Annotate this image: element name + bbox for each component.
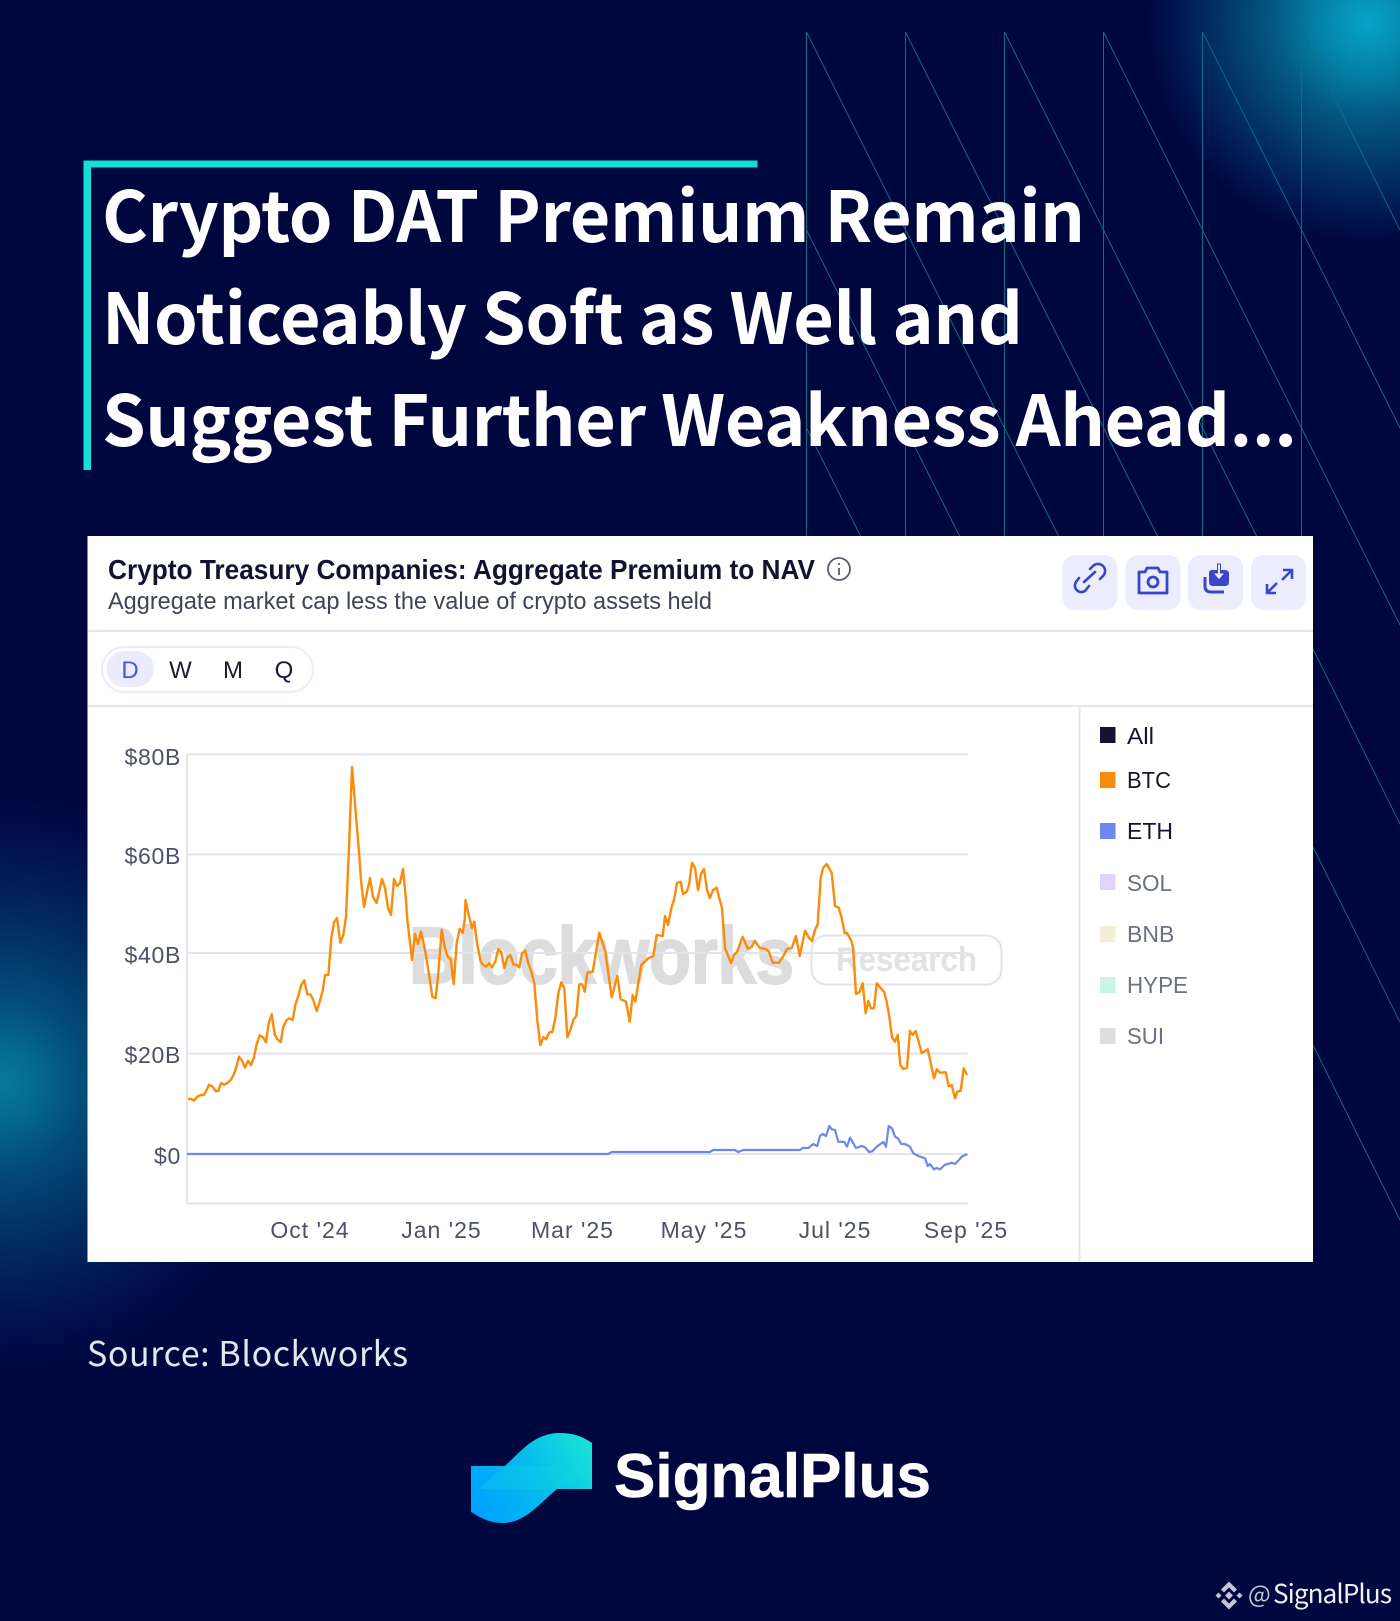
- watermark: Research: [836, 941, 977, 979]
- y axis labels: $40B: [124, 942, 181, 968]
- interval selector: Q: [275, 657, 293, 684]
- series: BTC: [188, 767, 967, 1101]
- handle text: SignalPlus: [1273, 1574, 1392, 1611]
- interval selector: W: [169, 657, 192, 684]
- grid lines: [187, 754, 968, 1204]
- at sign: @: [1248, 1575, 1271, 1610]
- icon: info: [828, 558, 850, 580]
- icon: camera: [1139, 568, 1167, 593]
- panel: chart card: [88, 536, 1313, 1262]
- legend: BNB: [1127, 921, 1174, 947]
- legend: HYPE: [1127, 972, 1188, 998]
- legend: [1100, 723, 1188, 1049]
- x axis labels: Jul '25: [799, 1217, 871, 1243]
- title text: Noticeably Soft as Well and: [102, 264, 1023, 365]
- x axis labels: Jan '25: [401, 1217, 482, 1243]
- legend: SUI: [1127, 1023, 1164, 1049]
- accent bracket: [84, 160, 758, 470]
- y axis labels: $60B: [124, 843, 181, 869]
- title with accent bracket: [84, 160, 1297, 470]
- title text: Crypto DAT Premium Remain: [102, 162, 1085, 263]
- x axis labels: [270, 1217, 1008, 1243]
- legend: SOL: [1127, 870, 1172, 896]
- x axis labels: Sep '25: [924, 1217, 1008, 1243]
- y axis labels: $20B: [124, 1042, 181, 1068]
- icon: ribbon mark: [471, 1433, 592, 1523]
- x axis labels: Oct '24: [270, 1217, 350, 1243]
- watermark: Blockworks: [409, 911, 794, 1000]
- interval selector: D: [121, 657, 139, 684]
- x axis labels: May '25: [661, 1217, 747, 1243]
- icon: link: [1075, 564, 1105, 592]
- y axis labels: $80B: [124, 744, 181, 770]
- legend: BTC: [1127, 767, 1171, 793]
- icon: exchange diamond: [1216, 1582, 1242, 1610]
- x axis labels: Mar '25: [531, 1217, 614, 1243]
- y axis labels: $0: [154, 1143, 181, 1169]
- legend: ETH: [1127, 818, 1173, 844]
- line chart: [124, 744, 1008, 1243]
- icon: download stack: [1205, 564, 1229, 592]
- brand logo: [471, 1433, 931, 1523]
- y axis labels: [124, 744, 181, 1169]
- interval selector: M: [223, 657, 243, 684]
- legend: All: [1127, 723, 1154, 749]
- chart heading: Crypto Treasury Companies: Aggregate Premium to NAV: [108, 554, 815, 585]
- interval selector: [102, 647, 313, 692]
- wordmark: SignalPlus: [614, 1442, 931, 1511]
- footer handle: [1216, 1574, 1392, 1611]
- toolbar buttons: [1062, 555, 1306, 610]
- series: ETH: [187, 1126, 967, 1169]
- title text: Suggest Further Weakness Ahead...: [102, 366, 1297, 467]
- chart subtitle: Aggregate market cap less the value of crypto assets held: [108, 588, 712, 615]
- source note: Source: Blockworks: [87, 1327, 408, 1376]
- icon: expand: [1267, 570, 1292, 593]
